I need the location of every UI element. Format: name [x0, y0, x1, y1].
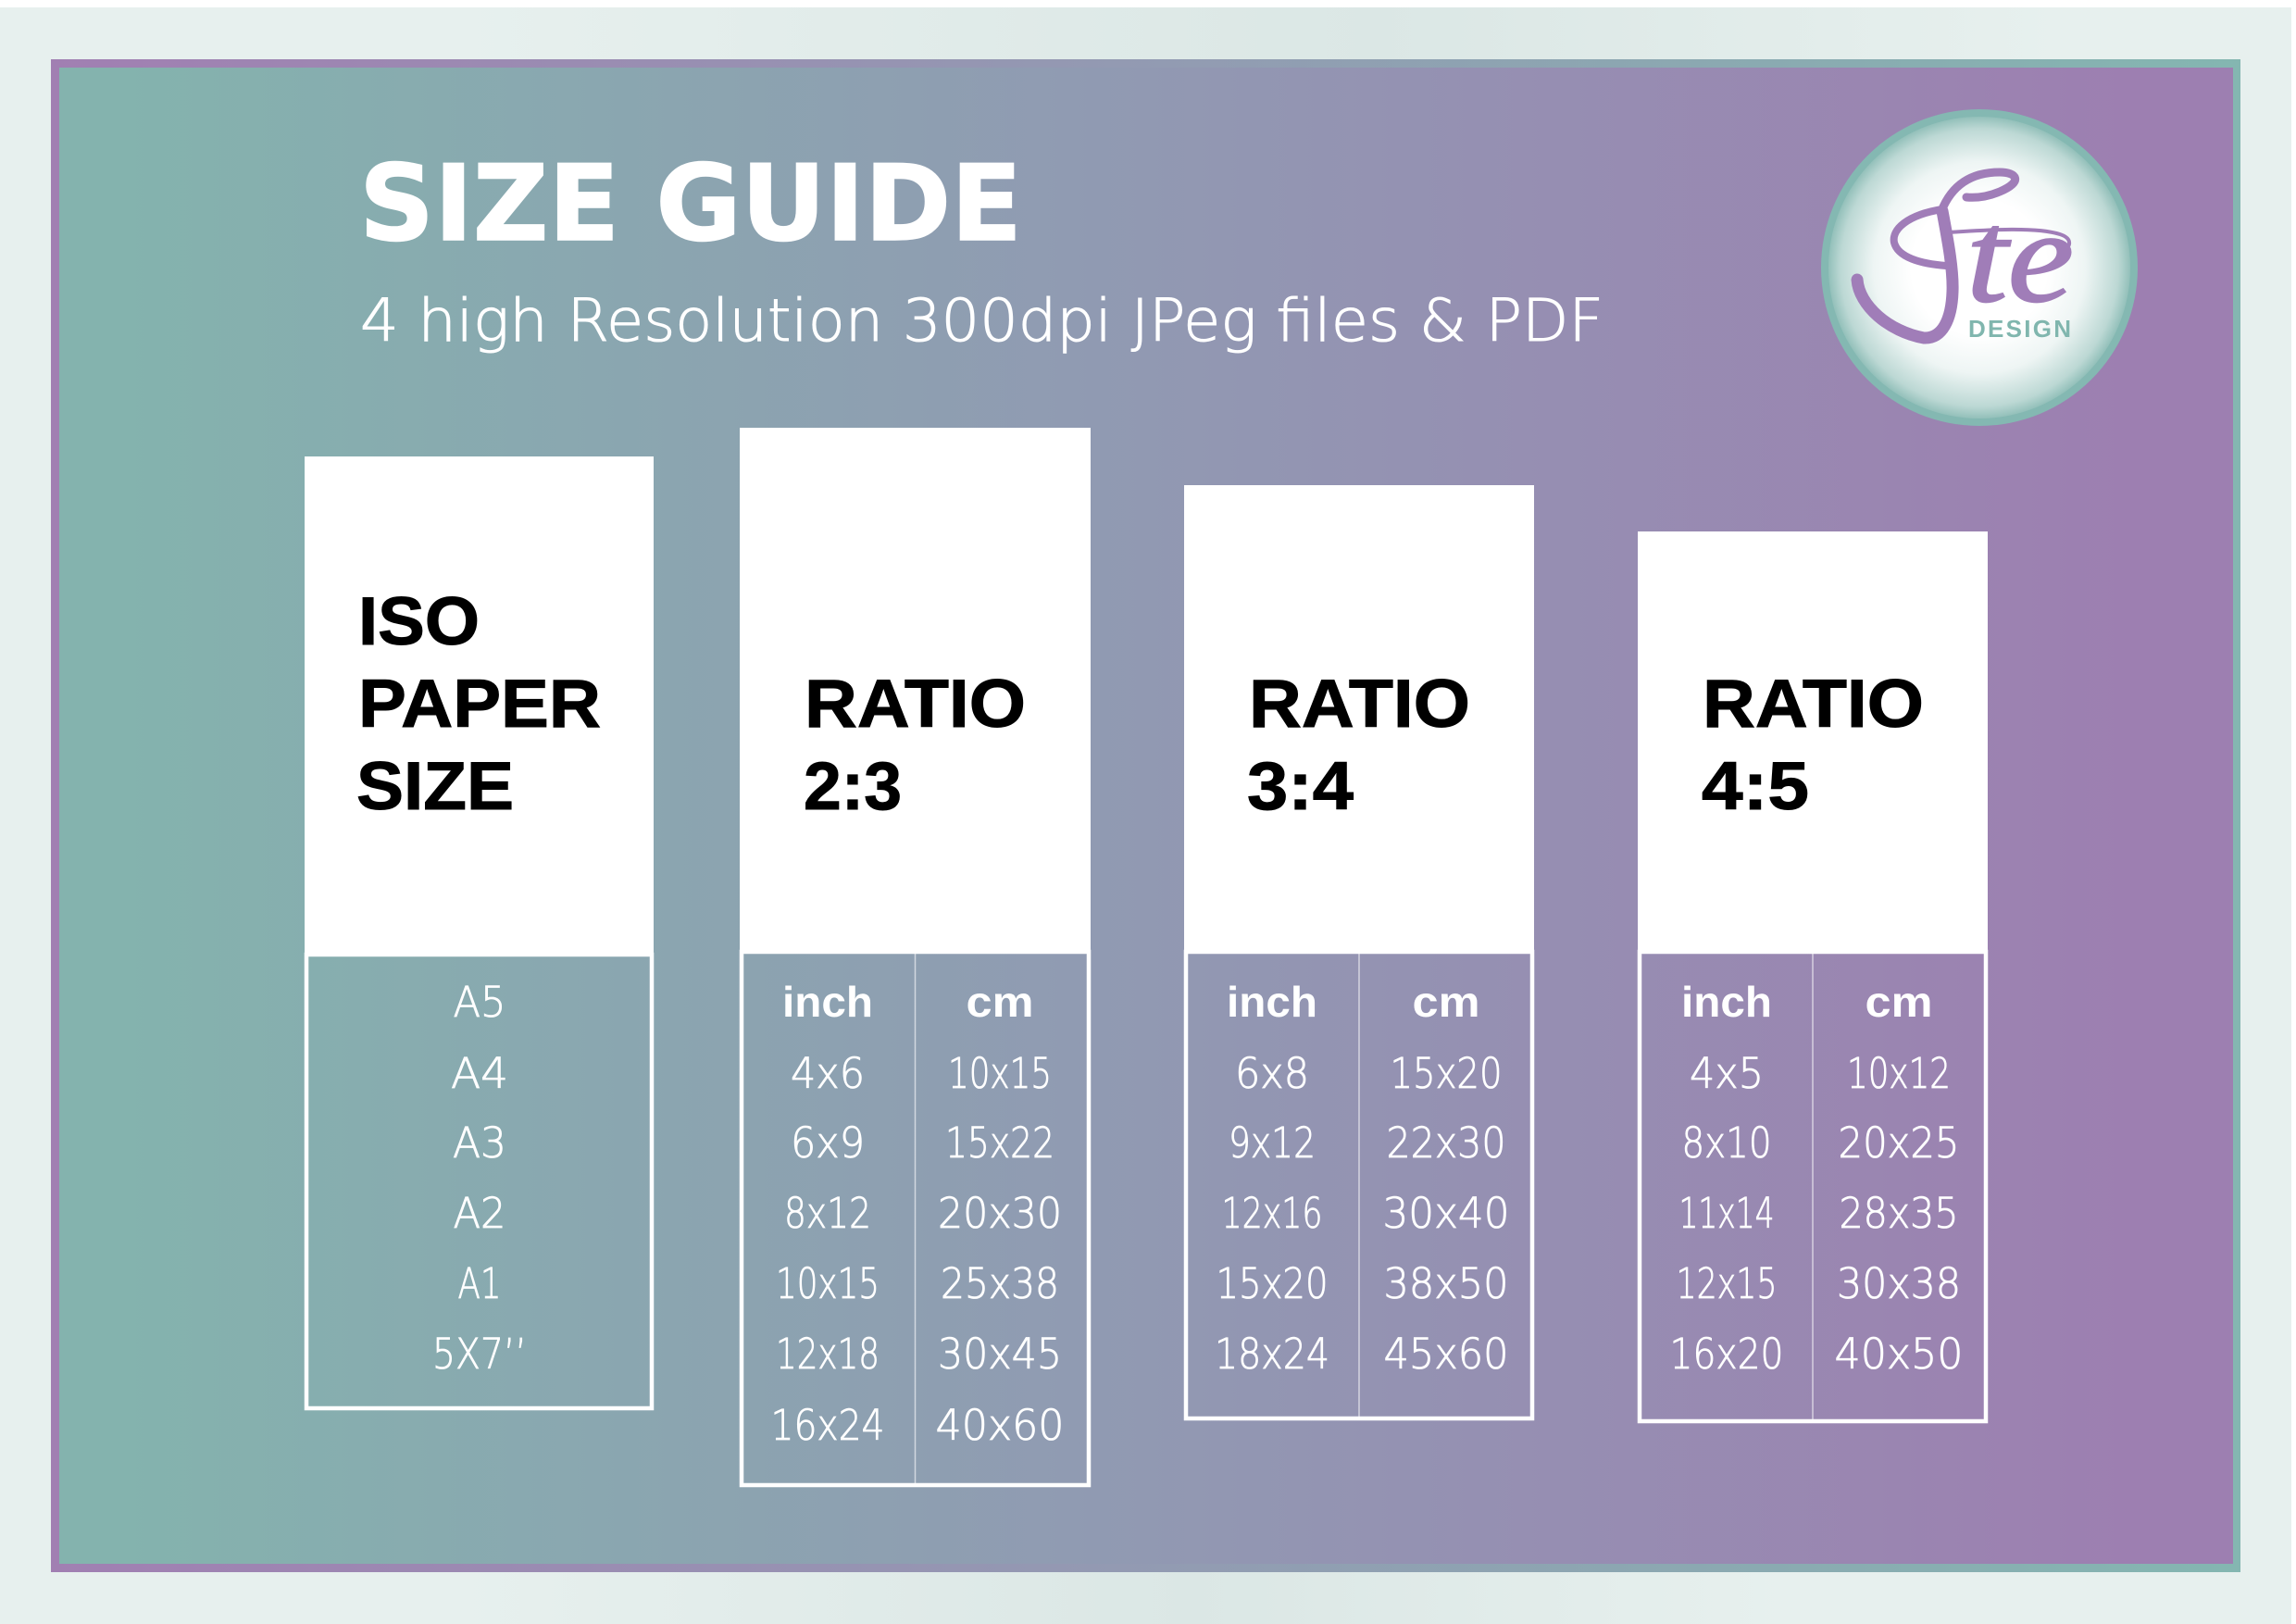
inch column: ratio 2:3: 10x15: [776, 1259, 880, 1308]
inch column: ratio 2:3: 16x24: [770, 1401, 885, 1450]
heading: RATIO 4:5: 4:5: [1702, 749, 1809, 824]
panel header: ISO paper size: [305, 456, 654, 956]
cm column: ratio 2:3: 40x60: [935, 1401, 1065, 1450]
size list: ISO: 5X7’’: [432, 1330, 527, 1379]
size list: ISO: A2: [454, 1189, 505, 1238]
title: SIZE GUIDE: [359, 143, 1022, 265]
inch column: ratio 2:3: 12x18: [776, 1330, 880, 1379]
size list: ISO: A3: [453, 1118, 506, 1168]
heading: ISO PAPER SIZE: SIZE: [356, 749, 514, 824]
panel: ISO paper size: [305, 456, 654, 1408]
cm column: ratio 2:3: cm: [967, 978, 1033, 1026]
inch column: ratio 3:4: 15x20: [1217, 1259, 1328, 1308]
cm column: ratio 4:5: 28x35: [1839, 1189, 1959, 1238]
subtitle: 4 high Resolution 300dpi JPeg files & PDF: [360, 287, 1603, 355]
table frame: ISO: [306, 955, 652, 1408]
inch column: ratio 4:5: [1670, 978, 1783, 1379]
inch column: ratio 4:5: 11x14: [1679, 1189, 1774, 1238]
cm column: ratio 2:3: [935, 978, 1065, 1450]
cm column: ratio 3:4: 38x50: [1383, 1259, 1509, 1308]
inch column: ratio 2:3: 8x12: [784, 1189, 871, 1238]
table frame: ratio 4:5: [1640, 952, 1986, 1421]
cm column: ratio 2:3: 25x38: [941, 1259, 1059, 1308]
logo: Ste Design: [1821, 109, 2138, 426]
inch column: ratio 3:4: 18x24: [1215, 1330, 1329, 1379]
inch column: ratio 2:3: 4x6: [791, 1049, 865, 1098]
cm column: ratio 4:5: 10x12: [1847, 1049, 1951, 1098]
size list: ISO: A1: [457, 1259, 502, 1308]
heading: RATIO 2:3: 2:3: [804, 749, 902, 824]
heading: ISO PAPER SIZE: [356, 584, 601, 824]
size list: ISO: A5: [454, 978, 505, 1027]
heading: ISO PAPER SIZE: ISO: [358, 584, 480, 659]
logo: Ste Design: DESIGN: [1968, 315, 2071, 343]
cm column: ratio 4:5: cm: [1865, 978, 1933, 1026]
inch column: ratio 4:5: 16x20: [1670, 1330, 1783, 1379]
table frame: ratio 3:4: [1186, 952, 1532, 1418]
size list: ISO: [432, 978, 527, 1379]
heading: RATIO 3:4: [1247, 667, 1470, 824]
inch column: ratio 3:4: 12x16: [1222, 1189, 1322, 1238]
heading: RATIO 2:3: [804, 667, 1026, 824]
inch column: ratio 4:5: 8x10: [1681, 1118, 1772, 1168]
table frame: ratio 2:3: [742, 952, 1089, 1485]
panel: ratio 3:4: [1184, 485, 1534, 1418]
inch column: ratio 4:5: 12x15: [1676, 1259, 1778, 1308]
size list: ISO: A4: [451, 1049, 508, 1098]
panel: ratio 2:3: [740, 428, 1091, 1485]
panel header: ratio 2:3: [740, 428, 1091, 954]
cm column: ratio 4:5: 30x38: [1837, 1259, 1961, 1308]
cm column: ratio 3:4: 45x60: [1383, 1330, 1509, 1379]
inch column: ratio 2:3: [770, 978, 885, 1450]
inch column: ratio 2:3: 6x9: [791, 1118, 865, 1168]
heading: RATIO 2:3: RATIO: [805, 667, 1026, 742]
cm column: ratio 2:3: 30x45: [938, 1330, 1062, 1379]
inch column: ratio 4:5: 4x5: [1690, 1049, 1764, 1098]
cm column: ratio 3:4: 30x40: [1383, 1189, 1509, 1238]
cm column: ratio 3:4: 15x20: [1391, 1049, 1502, 1098]
cm column: ratio 4:5: 20x25: [1839, 1118, 1959, 1168]
cm column: ratio 2:3: 20x30: [938, 1189, 1062, 1238]
cm column: ratio 4:5: 40x50: [1835, 1330, 1963, 1379]
panel header: ratio 4:5: [1638, 531, 1988, 954]
cm column: ratio 2:3: 15x22: [945, 1118, 1054, 1168]
heading: RATIO 4:5: RATIO: [1703, 667, 1924, 742]
inch column: ratio 2:3: inch: [782, 978, 873, 1026]
inch column: ratio 3:4: inch: [1227, 978, 1317, 1026]
heading: RATIO 4:5: [1702, 667, 1924, 824]
cm column: ratio 3:4: [1383, 978, 1509, 1379]
heading: RATIO 3:4: 3:4: [1247, 749, 1354, 824]
cm column: ratio 3:4: 22x30: [1387, 1118, 1505, 1168]
cm column: ratio 2:3: 10x15: [948, 1049, 1052, 1098]
cm column: ratio 3:4: cm: [1413, 978, 1479, 1026]
heading: RATIO 3:4: RATIO: [1249, 667, 1470, 742]
inch column: ratio 4:5: inch: [1681, 978, 1772, 1026]
panel header: ratio 3:4: [1184, 485, 1534, 954]
inch column: ratio 3:4: 6x8: [1235, 1049, 1309, 1098]
logo: Ste Design: te: [1966, 183, 2074, 330]
heading: ISO PAPER SIZE: PAPER: [358, 667, 601, 742]
cm column: ratio 4:5: [1835, 978, 1963, 1379]
panel: ratio 4:5: [1638, 531, 1988, 1421]
inch column: ratio 3:4: 9x12: [1229, 1118, 1316, 1168]
inch column: ratio 3:4: [1215, 978, 1329, 1379]
